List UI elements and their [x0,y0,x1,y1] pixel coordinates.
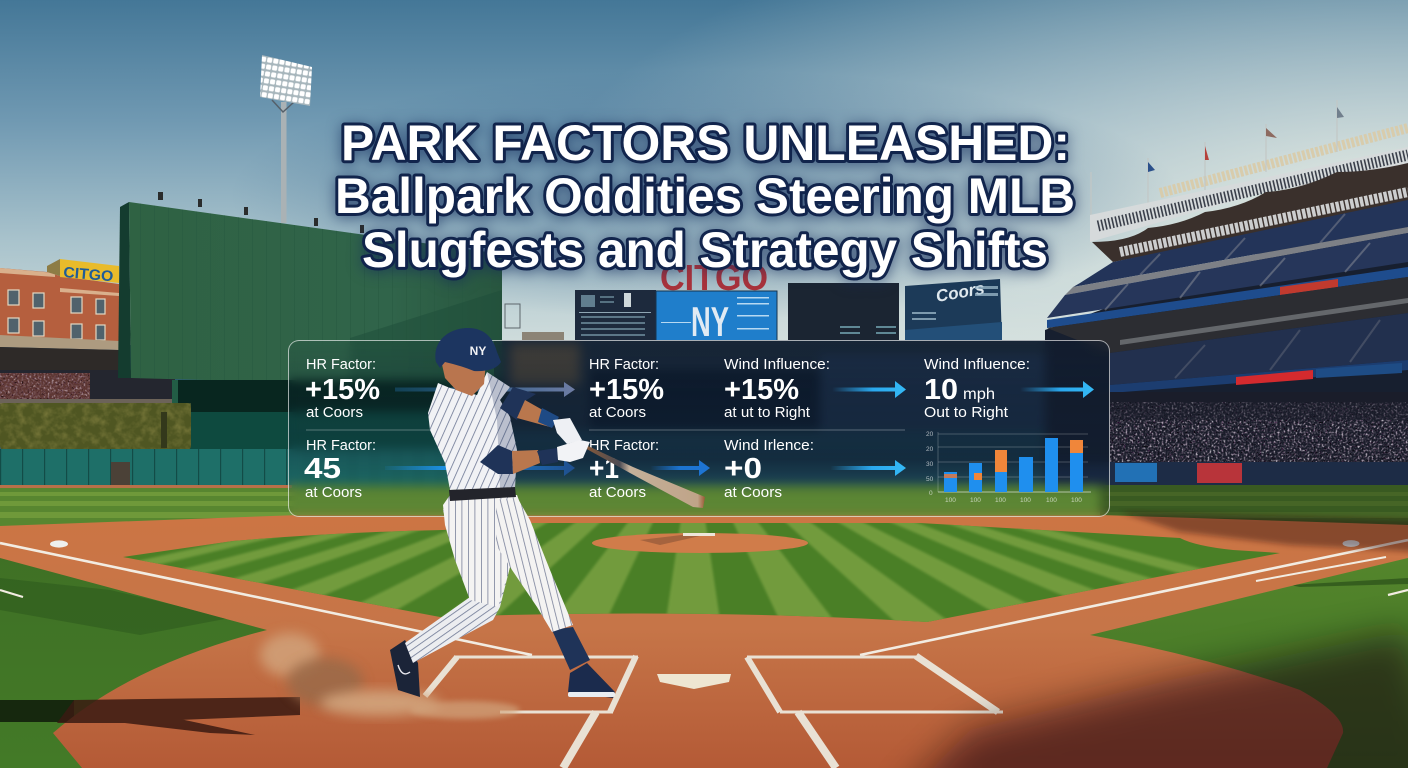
bar chart [926,431,1091,504]
stat: HR factor +15%: +15% [305,374,380,406]
chalk foul lines [0,540,1408,655]
sun shadows on the right [900,512,1408,768]
stat: wind influence +0 [724,437,814,501]
concourse and dim background behind panel [502,340,1070,485]
stat: HR factor +15% [305,357,380,421]
stat: wind influence +0: +0 [724,453,762,485]
stat: HR factor +1: +1 [589,453,619,485]
stat: HR factor +15% second column: HR Factor: [589,357,659,373]
infield bases [50,540,1360,548]
scoreboard three [788,283,899,343]
scoreboard one [575,290,656,348]
blue ribbon board [1047,267,1408,328]
front sock and shoe [552,627,615,698]
scoreboard four with script logo [905,279,1002,342]
stat: wind influence +15%: Wind Influence: [724,356,830,373]
stat: wind influence 10 mph: 10 [924,374,958,406]
second ribbon board [1110,360,1408,393]
front arm [480,440,590,474]
foul territory grass left [0,550,280,768]
front leg [496,497,573,632]
outfield grass [0,485,1408,530]
title: PARK FACTORS UNLEASHED: [341,115,1070,171]
stat: wind influence 10 mph: Out to Right [924,405,1008,421]
stat: HR factor +15%: HR Factor: [306,357,376,373]
stat: wind influence +15%: +15% [724,374,799,406]
light tower [260,55,312,223]
CITGO sign [60,259,119,285]
axis labels: 20 [926,446,934,453]
home plate [657,674,731,689]
roof shadow [1092,163,1408,262]
stat: wind influence 10 mph: mph [963,386,995,403]
white columns band [1120,192,1408,252]
back leg [405,497,520,663]
stat: HR factor +15% second column: +15% [589,374,664,406]
arrow: row 2 first [385,460,575,476]
bars [944,438,1083,492]
stat: wind influence 10 mph [924,356,1030,421]
stat: HR factor +15%: at Coors [306,405,363,421]
dark green wall base [172,380,502,452]
batting helmet [435,328,501,371]
translucent stats panel [288,340,1110,517]
dirt warning track and infield dirt [0,515,1408,768]
stat: HR factor 45: at Coors [305,485,362,501]
axis labels [926,431,1082,504]
axis labels: 100 [1071,497,1082,504]
axis labels: 30 [926,461,934,468]
orange bar segments [944,440,1083,480]
stat: HR factor 45: 45 [304,453,341,485]
concrete band [1065,227,1408,295]
title: Ballpark Oddities Steering MLB [335,168,1075,224]
stat: wind influence +0: at Coors [724,485,782,501]
lower seats [1110,313,1408,385]
outfield wall pads [1045,462,1408,488]
green outfield wall [118,202,502,388]
axis labels: 100 [945,497,956,504]
left field wall lamps [158,192,364,233]
stat: wind influence +0: Wind Irlence: [724,437,814,454]
stat: HR factor +15% second column [589,357,664,421]
stat: HR factor +1: HR Factor: [589,438,659,454]
axis labels: 100 [1046,497,1057,504]
back arm [500,387,582,444]
scoreboard four with script logo: Coors [934,279,986,306]
arrow: row 1 second [832,381,906,398]
right grandstand [1045,100,1408,488]
head and face [441,360,486,396]
ground shadow of batter [57,697,300,735]
crowd [1045,392,1408,464]
rear shoe [390,640,420,697]
arrow: row 1 first [395,382,575,397]
row dividers [306,429,905,431]
middle deck seats [1047,233,1408,318]
brick building with CITGO sign [0,259,175,408]
stat: HR factor 45: HR Factor: [306,438,376,454]
bat [583,446,705,508]
stat: wind influence 10 mph: Wind Influence: [924,356,1030,373]
dust cloud [260,633,520,719]
sky [0,0,1408,345]
foul territory grass right [1085,550,1408,768]
batting helmet: NY [470,344,486,358]
upper deck seats [1073,200,1408,287]
batter's boxes [425,656,1003,768]
scoreboard two with NY logo: NY [691,298,729,345]
stat: wind influence +15% [724,356,830,421]
axis labels: 100 [970,497,981,504]
stat: HR factor 45 [304,438,376,501]
jersey shadow [487,372,517,488]
belt [449,487,516,501]
facade [1090,147,1408,242]
flags [1091,100,1344,215]
upper pants [443,495,530,607]
teal outfield fence [0,449,502,485]
axis labels: 50 [926,476,934,483]
red CITGO letters: CITGO [660,257,768,298]
skyline scoreboards [505,257,1002,362]
axis labels: 100 [1020,497,1031,504]
axis labels: 20 [926,431,934,438]
axis labels: 0 [929,490,933,497]
stat: HR factor +1 [589,438,659,501]
pitcher's mound [592,533,808,553]
CITGO sign: CITGO [63,264,114,285]
arrow: row 1 third [1020,381,1094,398]
suites level [1047,277,1408,353]
stat: HR factor +15% second column: at Coors [589,405,646,421]
title: Slugfests and Strategy Shifts [362,222,1048,278]
upper lamp rail [1160,128,1408,193]
small structures [505,304,564,362]
infield grass with mow stripes [123,523,1280,622]
ivy hedge [0,403,191,450]
arrow: row 2 second [650,460,710,476]
scoreboard two with NY logo [656,291,777,347]
stat: wind influence +15%: at ut to Right [724,405,810,421]
arrow: row 2 third [830,460,906,476]
torso [428,372,517,490]
axis labels: 100 [995,497,1006,504]
stat: HR factor +1: at Coors [589,485,646,501]
